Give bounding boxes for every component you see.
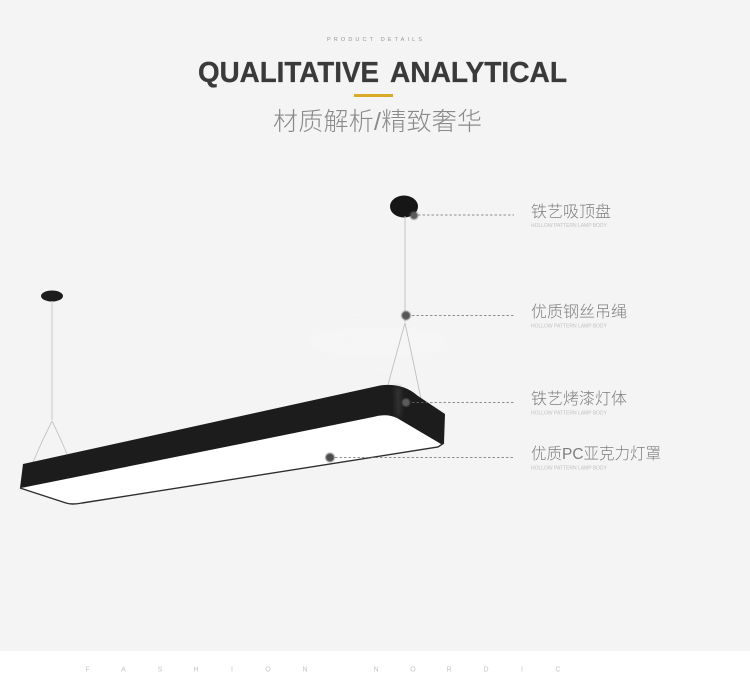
eyebrow text: PRODUCT DETAILS: [327, 37, 422, 43]
footer text: S: [158, 666, 163, 674]
lamp black body: [20, 385, 445, 488]
label: steel wire: [531, 303, 627, 330]
footer text: [85, 666, 561, 674]
label: lamp body: 铁艺烤漆灯体: [531, 390, 627, 408]
title: ANALYTICAL: [390, 57, 567, 89]
footer text: F: [85, 666, 90, 674]
faint reflection: [300, 328, 456, 356]
footer text: H: [193, 666, 199, 674]
footer text: I: [521, 666, 523, 674]
gold accent bar: [354, 94, 393, 97]
label: lamp body: HOLLOW PATTERN LAMP BODY: [531, 410, 607, 416]
label: ceiling plate: [531, 203, 611, 229]
label: acrylic cover: 优质PC亚克力灯罩: [531, 445, 661, 463]
lamp bottom edge: [20, 443, 444, 504]
subtitle: 材质解析/精致奢华: [273, 108, 482, 136]
footer text: O: [410, 666, 416, 674]
right suspension wires: [388, 216, 421, 399]
footer text: N: [373, 666, 379, 674]
footer text: N: [302, 666, 308, 674]
footer band: [0, 651, 750, 688]
label: steel wire: 优质钢丝吊绳: [531, 303, 627, 321]
title: [198, 57, 567, 89]
callout leader lines: [335, 215, 514, 458]
corner sheen: [396, 387, 400, 416]
label: ceiling plate: 铁艺吸顶盘: [531, 203, 611, 221]
label: acrylic cover: [531, 445, 661, 472]
footer text: I: [231, 666, 233, 674]
label: ceiling plate: HOLLOW PATTERN LAMP BODY: [531, 223, 607, 229]
title: QUALITATIVE: [198, 57, 379, 89]
footer text: O: [265, 666, 271, 674]
label: steel wire: HOLLOW PATTERN LAMP BODY: [531, 324, 607, 330]
footer text: A: [121, 666, 126, 674]
label: acrylic cover: HOLLOW PATTERN LAMP BODY: [531, 466, 607, 472]
footer text: D: [483, 666, 489, 674]
footer text: R: [446, 666, 452, 674]
lamp glowing diffuser: [21, 415, 441, 503]
left ceiling mount: [41, 290, 63, 302]
right ceiling mount: [390, 196, 418, 218]
label: lamp body: [531, 390, 627, 416]
pendant lamp illustration: [20, 196, 456, 504]
callout markers: [326, 212, 418, 462]
footer text: C: [555, 666, 561, 674]
left suspension wires: [33, 301, 67, 462]
